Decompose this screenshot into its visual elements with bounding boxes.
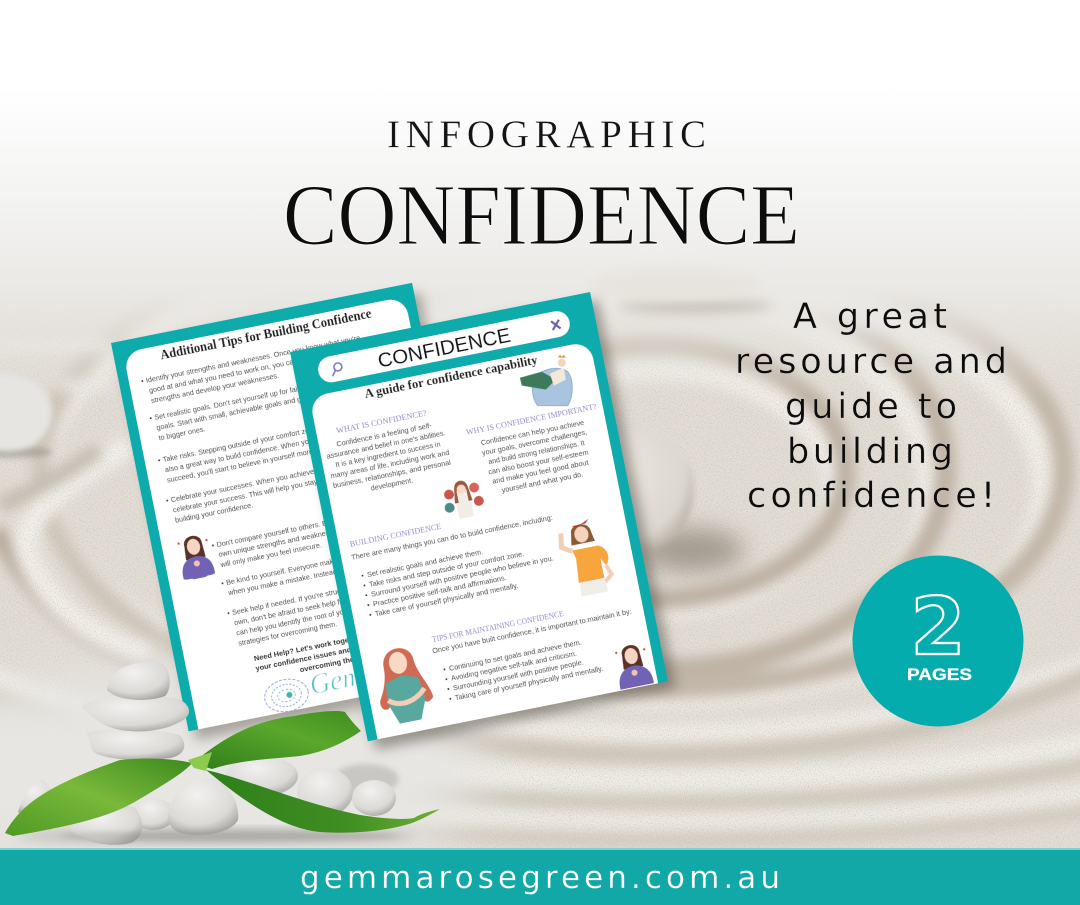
blurred background stones (0, 269, 773, 572)
tips list: Don't compare yourself to others. Everyone has their (216, 507, 382, 549)
guide heading: A guide for confidence capability (363, 352, 539, 401)
tips list: strategies for overcoming them. (237, 619, 338, 648)
website address: gemmarosegreen.com.au (300, 860, 780, 896)
tips list: goals. Start with small, achievable goals and gradually work (156, 386, 344, 432)
tips list: • (140, 376, 145, 386)
tips for maintaining confidence: Continuing to set goals and achieve them. (448, 638, 582, 673)
tips for maintaining confidence: Surrounding yourself with positive people. (452, 658, 584, 692)
badge: 2 pages: 2 (911, 581, 965, 673)
why is confidence important: and make you feel good about (491, 458, 589, 486)
call to action: your confidence issues and collaborate on (255, 635, 404, 673)
tips list: celebrate your success. This will help you stay motivated and (172, 468, 364, 515)
logo: flower and signature (261, 654, 400, 715)
tips list: to bigger ones. (158, 424, 206, 442)
tips list: own unique strengths and weaknesses. Comparing yourself (218, 513, 406, 559)
page: additional tips (111, 283, 490, 731)
what is confidence: development. (370, 475, 414, 493)
tips for maintaining confidence: • (448, 694, 453, 703)
what is confidence: many areas of life, including work and (330, 448, 450, 480)
building confidence: There are many things you can do to build confidence, including: (351, 513, 553, 562)
page heading: Additional Tips for Building Confidence (159, 306, 373, 362)
subtitle: INFOGRAPHIC: INFOGRAPHIC (387, 113, 706, 156)
why is confidence important: your goals, overcome challenges, (481, 427, 588, 457)
tagline: guide to (785, 387, 957, 427)
why is confidence important: WHY IS CONFIDENCE IMPORTANT? (465, 401, 598, 437)
tips list: Be kind to yourself. Everyone makes mistakes. Be kind (225, 544, 399, 587)
search text: CONFIDENCE (376, 325, 513, 373)
tagline (735, 297, 1007, 516)
front page shadow (298, 300, 676, 750)
illustration: strong woman in orange shirt (557, 516, 615, 599)
why is confidence important: can also boost your self-esteem (487, 448, 589, 476)
tagline: confidence! (747, 476, 995, 516)
tagline: building (787, 432, 953, 472)
bamboo leaves (5, 711, 440, 841)
why is confidence important: yourself and what you do. (501, 470, 584, 495)
tips list: succeed, you'll start to believe in yourself more. (166, 446, 316, 485)
tips for maintaining confidence: • (446, 684, 451, 694)
icon: close (551, 320, 561, 330)
leaf: upper right (193, 711, 361, 769)
call to action: Need Help? Let's work together to discuss (253, 625, 401, 663)
illustration: woman with flowers (440, 477, 486, 521)
leaf: lower right (206, 770, 440, 833)
tips list: can help you identify the root of your issues and develop (235, 594, 413, 637)
building confidence: • (366, 600, 371, 610)
tips list: Set realistic goals. Don't set yourself up for failure by setting (154, 376, 342, 422)
tips list: when you make a mistake. Instead of beating yourself up (226, 553, 407, 597)
tips for maintaining confidence: Avoiding negative self-talk and criticism. (450, 649, 577, 683)
tips list: Identify your strengths and weaknesses. Once you know what you're (145, 333, 361, 385)
tips list: own, don't be afraid to seek help from a therapist. A (233, 586, 396, 627)
why is confidence important: and build strong relationships. It (487, 438, 585, 466)
leaf: left (5, 759, 192, 836)
tips list: • (211, 541, 215, 550)
tips list: • (157, 456, 162, 465)
call to action (253, 625, 406, 683)
what is confidence (321, 405, 454, 500)
badge: 2 pages (852, 556, 1024, 726)
tips list: also a great way to build confidence. When you take risks and (164, 427, 359, 474)
icon: magnifier (330, 362, 343, 376)
tips list: • (226, 608, 231, 618)
tips for maintaining confidence: • (442, 665, 447, 674)
search bar (316, 309, 572, 385)
illustration: woman on throne (520, 355, 572, 406)
stone stack (15, 662, 415, 845)
why is confidence important: Confidence can help you achieve (480, 418, 585, 447)
tagline: resource and (735, 342, 1007, 382)
tips for maintaining confidence: TIPS FOR MAINTAINING CONFIDENCE (431, 608, 564, 644)
tips list: • (220, 579, 225, 588)
building confidence: Surround yourself with positive people who believe in you. (370, 553, 554, 599)
why is confidence important (465, 401, 610, 499)
building confidence: Practice positive self-talk and affirmations. (372, 573, 507, 609)
tips for maintaining confidence: Once you have built confidence, it is important to maintain it by: (431, 607, 632, 655)
tips for maintaining confidence (429, 595, 642, 705)
tips list: good at and what you need to work on, you can focus on your (148, 347, 343, 395)
building confidence: Take risks and step outside of your comfort zone. (368, 549, 525, 589)
what is confidence: It is a key ingredient to success in (335, 439, 441, 469)
tips list: • (149, 413, 153, 423)
tips for maintaining confidence: • (444, 674, 449, 684)
tips list: Take risks. Stepping outside of your comfort zone is (162, 423, 325, 464)
illustration: red-haired woman with crossed arms (370, 643, 437, 727)
tagline: A great (793, 297, 947, 337)
building confidence (348, 499, 565, 621)
tips list: building your confidence. (174, 500, 254, 525)
back page shadow (120, 292, 495, 740)
tips list (140, 331, 424, 656)
badge: 2 pages: PAGES (907, 665, 972, 684)
page: confidence guide (290, 292, 668, 741)
tips list: • (165, 496, 170, 505)
title (283, 113, 800, 263)
what is confidence: business, relationships, and personal (332, 458, 452, 490)
what is confidence: Confidence is a feeling of self- (336, 421, 433, 449)
building confidence: Set realistic goals and achieve them. (366, 547, 484, 579)
tips list: strengths and develop your weaknesses. (150, 371, 280, 405)
tips for maintaining confidence: Taking care of yourself physically and mentally. (454, 664, 604, 702)
footer bar (0, 848, 1080, 905)
tips list: will only make you feel insecure. (219, 540, 323, 569)
tips list: Celebrate your successes. When you achieve a goal, take time to (170, 455, 376, 504)
building confidence: Take care of yourself physically and mentally. (374, 581, 519, 618)
what is confidence: WHAT IS CONFIDENCE? (335, 407, 428, 435)
building confidence: • (360, 571, 365, 580)
main title: CONFIDENCE: CONFIDENCE (283, 166, 800, 263)
icon: girl with heart hands (176, 533, 216, 581)
what is confidence: assurance and belief in one's abilities. (326, 428, 446, 461)
illustration: purple girl with heart hands (612, 642, 654, 690)
building confidence: • (362, 581, 367, 590)
logo: flower and signature: Gemma (307, 654, 399, 701)
building confidence: • (368, 610, 373, 620)
call to action: overcoming them. (299, 653, 363, 674)
building confidence: BUILDING CONFIDENCE (349, 521, 442, 549)
building confidence: • (364, 590, 369, 600)
tips list: Seek help if needed. If you're struggling to build confidence (231, 571, 417, 617)
